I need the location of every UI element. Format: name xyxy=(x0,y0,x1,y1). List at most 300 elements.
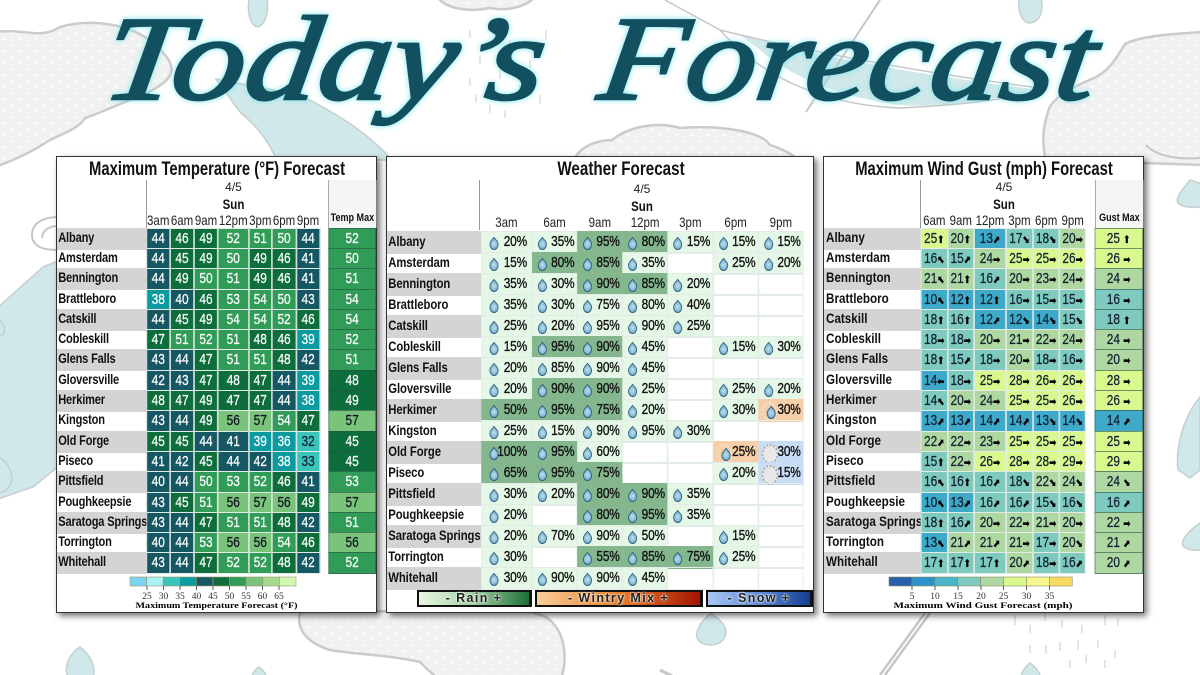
temperature table: 45 xyxy=(175,434,189,450)
wind gust colour legend: 15 xyxy=(953,592,963,602)
temperature table: 52 xyxy=(227,555,240,571)
wind gust table: 13⬈ xyxy=(950,495,971,511)
wind gust table xyxy=(824,228,1143,574)
temperature table: 49 xyxy=(199,312,213,328)
wind gust table: 20➡ xyxy=(1009,352,1030,368)
precipitation table: 20% xyxy=(504,360,527,376)
temperature table: 42 xyxy=(301,555,315,571)
precipitation table: 95% xyxy=(551,339,574,355)
temperature table: Amsterdam xyxy=(58,250,118,265)
precipitation table: 95% xyxy=(642,507,665,523)
temperature colour legend: 55 xyxy=(241,592,251,602)
precipitation table: Glens Falls xyxy=(388,360,448,375)
wind gust table: 17➡ xyxy=(1036,535,1056,551)
wind gust table: 28➡ xyxy=(1009,454,1030,470)
temperature table: 46 xyxy=(277,474,291,490)
temperature table: 51 xyxy=(175,332,189,348)
wind gust table: 15⬊ xyxy=(1062,312,1083,328)
precipitation table: 95% xyxy=(551,465,574,481)
temperature table: 45 xyxy=(345,434,359,450)
temperature table: 38 xyxy=(152,292,165,308)
temperature table: 51 xyxy=(345,515,359,531)
wind gust table: 21⬈ xyxy=(950,535,971,551)
precipitation table: 95% xyxy=(551,444,574,460)
wind gust table: Torrington xyxy=(826,534,884,550)
wind gust table: 22➡ xyxy=(1009,515,1030,531)
precipitation table: 20% xyxy=(504,528,527,544)
temperature table: 50 xyxy=(277,231,291,247)
temperature table: 47 xyxy=(175,393,189,409)
temperature table: 40 xyxy=(175,292,189,308)
precipitation table: 75% xyxy=(687,549,710,565)
temperature table: 47 xyxy=(254,393,267,409)
temperature table: 41 xyxy=(227,434,240,450)
wind gust table: 25➡ xyxy=(1036,251,1056,267)
hour labels: 6am xyxy=(923,212,945,228)
temperature table: 36 xyxy=(277,434,291,450)
wind gust table: 15⬆ xyxy=(924,454,944,470)
temperature colour legend: Maximum Temperature Forecast (°F) xyxy=(136,600,298,610)
temperature table: 38 xyxy=(301,393,315,409)
temperature table: Poughkeepsie xyxy=(58,494,131,509)
temperature table: 45 xyxy=(175,251,189,267)
temperature table: 53 xyxy=(199,535,213,551)
temperature table: 47 xyxy=(199,352,213,368)
heading: wind gust: Maximum Wind Gust (mph) Forecast xyxy=(855,159,1112,180)
wind gust table: 20➡ xyxy=(1062,515,1083,531)
wind gust table: 16⬈ xyxy=(980,495,1000,511)
hour labels: 9pm xyxy=(297,212,319,228)
wind gust table: 18➡ xyxy=(980,352,1000,368)
precipitation table: 95% xyxy=(551,402,574,418)
precipitation table: 30% xyxy=(504,486,527,502)
wind gust table: 20⬆ xyxy=(950,231,971,247)
temperature table: 56 xyxy=(227,413,240,429)
wind gust table: 12⬊ xyxy=(1009,312,1030,328)
temperature table: 54 xyxy=(277,535,291,551)
wind gust table: 15➡ xyxy=(1036,292,1056,308)
temperature table: 52 xyxy=(277,312,291,328)
precipitation table: Albany xyxy=(388,234,425,249)
column rule xyxy=(479,180,480,230)
temperature table: Kingston xyxy=(58,412,105,427)
temperature colour legend: 50 xyxy=(225,592,234,602)
temperature table: 46 xyxy=(277,251,291,267)
precipitation table: 70% xyxy=(551,528,574,544)
temperature table: 52 xyxy=(254,474,267,490)
precipitation table: 40% xyxy=(687,297,710,313)
precipitation table: 90% xyxy=(596,423,620,439)
wind gust table: 12⬈ xyxy=(980,312,1000,328)
precipitation table: 20% xyxy=(504,234,527,250)
temperature table: 48 xyxy=(277,515,291,531)
hour labels: 12pm xyxy=(219,212,248,228)
wind gust colour legend: 10 xyxy=(930,592,940,602)
wind gust table: 14⬊ xyxy=(1062,413,1083,429)
temperature table: 48 xyxy=(254,332,267,348)
temperature table: 48 xyxy=(345,373,359,389)
precipitation table: 80% xyxy=(596,486,620,502)
temperature table: 32 xyxy=(301,434,315,450)
wind gust table: 13⬈ xyxy=(980,231,1000,247)
wind gust table: 20➡ xyxy=(1009,271,1030,287)
wind gust colour legend: 5 xyxy=(910,592,915,602)
wind gust table: Cobleskill xyxy=(826,331,881,347)
wind gust table: 14⬊ xyxy=(1036,312,1056,328)
temperature table: 45 xyxy=(345,454,359,470)
precipitation table: Poughkeepsie xyxy=(388,507,464,522)
wind gust table: 24➡ xyxy=(980,393,1000,409)
precipitation table: 90% xyxy=(596,570,620,586)
temperature table: Piseco xyxy=(58,453,93,468)
temperature table: 43 xyxy=(152,495,165,511)
precipitation table: Cobleskill xyxy=(388,339,441,354)
temperature table: 51 xyxy=(199,495,213,511)
wind gust table: 25⬆ xyxy=(924,231,944,247)
temperature table: 44 xyxy=(175,515,189,531)
precipitation table: 90% xyxy=(596,381,620,397)
hour labels: 6am xyxy=(543,214,566,230)
temperature table: 33 xyxy=(301,454,315,470)
precipitation table: 90% xyxy=(551,381,574,397)
wind gust table: 24➡ xyxy=(1062,332,1083,348)
precipitation table: 90% xyxy=(596,528,620,544)
hour labels: 6pm xyxy=(273,212,295,228)
wind gust table: 16➡ xyxy=(1062,352,1083,368)
precipitation table: 30% xyxy=(687,423,710,439)
hour labels xyxy=(923,212,1084,228)
hour labels: 9am xyxy=(195,212,217,228)
precipitation table: 25% xyxy=(504,318,527,334)
gust max column header: Gust Max xyxy=(1099,212,1140,224)
wind gust table: 20⬈ xyxy=(1009,555,1030,571)
wind gust table: 16➡ xyxy=(1009,292,1030,308)
wind gust table: 16⬈ xyxy=(950,515,971,531)
temperature table: 45 xyxy=(199,454,213,470)
temperature table: 51 xyxy=(345,352,359,368)
wind gust table: 18➡ xyxy=(924,332,944,348)
hour labels: 6pm xyxy=(1035,212,1057,228)
precipitation table: Torrington xyxy=(388,549,444,564)
precipitation table: 30% xyxy=(777,402,801,418)
precipitation table: 35% xyxy=(687,507,710,523)
temperature table: 57 xyxy=(254,413,267,429)
wind gust colour legend: 25 xyxy=(999,592,1008,602)
temperature table: 42 xyxy=(301,352,315,368)
precipitation table: 80% xyxy=(551,255,574,271)
precipitation table: 45% xyxy=(642,339,665,355)
temperature table: Saratoga Springs xyxy=(58,514,147,529)
temperature table: 48 xyxy=(277,555,291,571)
precipitation table: 25% xyxy=(732,255,755,271)
wind gust table: 25 ➡ xyxy=(1107,434,1131,450)
precipitation table: 20% xyxy=(504,507,527,523)
temperature table: Herkimer xyxy=(58,392,105,407)
wind gust table: 29 ➡ xyxy=(1107,454,1131,470)
wind gust table: Gloversville xyxy=(826,372,892,388)
temperature table: Torrington xyxy=(58,534,112,549)
day label: Sun xyxy=(223,196,244,212)
temperature table: 49 xyxy=(199,413,213,429)
precipitation table: 80% xyxy=(642,234,665,250)
wind gust table: 26➡ xyxy=(1062,373,1083,389)
hour labels: 9pm xyxy=(1061,212,1084,228)
temperature table: 44 xyxy=(199,434,213,450)
temperature table: 51 xyxy=(254,352,267,368)
wind gust table: 16 ⬈ xyxy=(1107,495,1131,511)
wind gust table: 18➡ xyxy=(950,373,971,389)
precipitation table: 75% xyxy=(596,297,620,313)
wind gust table: 18⬊ xyxy=(1036,231,1056,247)
wind gust table: 29➡ xyxy=(1062,454,1083,470)
temperature table: 39 xyxy=(301,332,315,348)
temperature table: Albany xyxy=(58,230,94,245)
temperature table: 46 xyxy=(301,535,315,551)
date label: 4/5 xyxy=(225,180,242,194)
precipitation table: 90% xyxy=(642,318,665,334)
temperature table: 48 xyxy=(152,393,165,409)
temperature table: 49 xyxy=(301,495,315,511)
precipitation table: 35% xyxy=(551,234,574,250)
wind gust table: Whitehall xyxy=(826,554,878,570)
temperature table: 57 xyxy=(345,413,359,429)
wind gust table: 15⬈ xyxy=(950,352,971,368)
temperature table: 51 xyxy=(227,352,240,368)
wind gust table: 14⬅ xyxy=(924,373,944,389)
precipitation table: Piseco xyxy=(388,465,424,480)
precipitation table: 25% xyxy=(732,444,755,460)
hour labels xyxy=(147,212,319,228)
temperature table: 52 xyxy=(345,231,359,247)
wind gust colour legend: Maximum Wind Gust Forecast (mph) xyxy=(894,600,1073,610)
temperature table: 48 xyxy=(277,352,291,368)
wind gust table: 22⬊ xyxy=(1036,474,1056,490)
temperature table: 44 xyxy=(175,474,189,490)
precipitation table: 35% xyxy=(642,255,665,271)
wind gust table: 20⬊ xyxy=(1062,535,1083,551)
wind gust table: 24➡ xyxy=(1062,271,1083,287)
temperature table: 41 xyxy=(301,474,315,490)
temperature table: 56 xyxy=(277,495,291,511)
wind gust table: 28➡ xyxy=(1036,454,1056,470)
temperature table: 41 xyxy=(152,454,165,470)
temperature table: 51 xyxy=(254,515,267,531)
legend: wintry mix xyxy=(535,590,703,607)
hour labels: 3pm xyxy=(249,212,271,228)
wind gust table: 13⬈ xyxy=(950,413,971,429)
wind gust table: 21⬉ xyxy=(924,271,944,287)
precipitation table: 85% xyxy=(551,360,574,376)
wind gust colour legend: 35 xyxy=(1045,592,1054,602)
temperature table: Bennington xyxy=(58,270,118,285)
temperature table: 54 xyxy=(277,413,291,429)
precipitation table: 20% xyxy=(777,255,801,271)
temperature table: 38 xyxy=(277,454,291,470)
temperature table: 53 xyxy=(227,292,240,308)
temperature table: 45 xyxy=(175,312,189,328)
temperature table: 46 xyxy=(301,312,315,328)
wind gust table: 14⬉ xyxy=(924,393,944,409)
temperature table: 47 xyxy=(301,413,315,429)
temperature table: 48 xyxy=(227,373,240,389)
wind gust table: Old Forge xyxy=(826,433,881,449)
temperature table: Pittsfield xyxy=(58,473,103,488)
wind gust table: 21⬈ xyxy=(980,535,1000,551)
wind gust table: 22➡ xyxy=(1036,332,1056,348)
precipitation table: 20% xyxy=(551,486,574,502)
precipitation table: 80% xyxy=(642,297,665,313)
temperature table: 54 xyxy=(254,292,267,308)
precipitation table: 15% xyxy=(504,255,527,271)
temperature table: 39 xyxy=(301,373,315,389)
precipitation table: 35% xyxy=(504,276,527,292)
wind gust table: 14⬈ xyxy=(1009,413,1030,429)
precipitation table: 85% xyxy=(642,276,665,292)
precipitation table: 20% xyxy=(687,276,710,292)
temperature table: 39 xyxy=(254,434,267,450)
temperature table: 44 xyxy=(301,231,315,247)
temperature table: 50 xyxy=(199,271,213,287)
temperature colour legend: 35 xyxy=(175,592,185,602)
wind gust table: 26➡ xyxy=(1036,373,1056,389)
temperature table xyxy=(57,228,376,574)
day label: Sun xyxy=(631,198,653,214)
wind gust table: 13⬈ xyxy=(924,413,944,429)
wind gust table: 16⬈ xyxy=(1009,495,1030,511)
temperature table: 56 xyxy=(345,535,359,551)
wind gust table: 16⬆ xyxy=(950,312,971,328)
precipitation table: 15% xyxy=(732,234,755,250)
wind gust table: Bennington xyxy=(826,270,891,286)
temperature colour legend xyxy=(130,576,298,610)
temperature table: 49 xyxy=(175,271,189,287)
hour labels: 3pm xyxy=(1008,212,1031,228)
wind gust table: Poughkeepsie xyxy=(826,494,905,510)
wind gust table: 18➡ xyxy=(1036,555,1056,571)
temperature table: 51 xyxy=(254,231,267,247)
wind gust table: 17⬆ xyxy=(950,555,971,571)
precipitation table: Whitehall xyxy=(388,570,438,585)
wind gust table: 25 ⬆ xyxy=(1107,231,1131,247)
temperature table: 57 xyxy=(345,495,359,511)
precipitation table: 20% xyxy=(504,381,527,397)
temperature table: 44 xyxy=(175,555,189,571)
temperature table: 44 xyxy=(152,231,165,247)
wind gust table: 21➡ xyxy=(1036,515,1056,531)
temperature table: 42 xyxy=(254,454,267,470)
temperature table: 42 xyxy=(301,515,315,531)
temperature table: Old Forge xyxy=(58,433,109,448)
precipitation table: 90% xyxy=(551,570,574,586)
precipitation table: 25% xyxy=(687,318,710,334)
wind gust table: 13⬉ xyxy=(924,535,944,551)
temperature table: 41 xyxy=(301,251,315,267)
temp max column header: Temp Max xyxy=(331,212,374,224)
wind gust table: 26➡ xyxy=(1062,393,1083,409)
temperature table: 49 xyxy=(199,251,213,267)
wind gust table: 26 ➡ xyxy=(1107,393,1131,409)
precipitation table: 95% xyxy=(596,234,620,250)
wind gust table: 12⬆ xyxy=(980,292,1000,308)
temperature table: 49 xyxy=(254,251,267,267)
column rule xyxy=(146,180,147,228)
wind gust table: 24 ➡ xyxy=(1107,271,1131,287)
hour labels: 9pm xyxy=(770,214,792,230)
wind gust table: 14⬈ xyxy=(980,413,1000,429)
precipitation table: 15% xyxy=(777,234,801,250)
temperature table: 42 xyxy=(152,373,165,389)
column rule xyxy=(920,180,921,228)
precipitation table: 75% xyxy=(596,465,620,481)
wind gust table: 26 ➡ xyxy=(1107,251,1131,267)
wind gust table: 24➡ xyxy=(980,251,1000,267)
precipitation table: 75% xyxy=(596,402,620,418)
temp max column header xyxy=(328,180,376,228)
wind gust table: 26➡ xyxy=(1062,251,1083,267)
temperature table: 42 xyxy=(175,454,189,470)
wind gust table: 28➡ xyxy=(1009,373,1030,389)
precipitation table: 90% xyxy=(642,486,665,502)
precipitation table: 15% xyxy=(777,465,801,481)
wind gust table: 16⬆ xyxy=(950,474,971,490)
temperature table: 54 xyxy=(227,312,240,328)
precipitation table: 30% xyxy=(551,297,574,313)
temperature table: 50 xyxy=(199,474,213,490)
wind gust table: 24 ⬊ xyxy=(1107,474,1131,490)
temperature table: 50 xyxy=(227,251,240,267)
wind gust table: 16 ➡ xyxy=(1107,292,1131,308)
temperature table: 52 xyxy=(254,555,267,571)
temperature table: 49 xyxy=(199,393,213,409)
temperature table: 47 xyxy=(199,515,213,531)
wind gust colour legend xyxy=(888,576,1073,610)
temperature table: 46 xyxy=(277,271,291,287)
wind gust table: 23➡ xyxy=(980,434,1000,450)
panel: maximum temperature forecast xyxy=(56,156,377,613)
temperature table: 56 xyxy=(227,495,240,511)
precipitation table: Saratoga Springs xyxy=(388,528,481,543)
temperature table: 49 xyxy=(199,231,213,247)
temperature table: 45 xyxy=(152,434,165,450)
heading: weather: Weather Forecast xyxy=(557,159,685,180)
wind gust table: 22➡ xyxy=(950,434,971,450)
precipitation table: 50% xyxy=(504,402,527,418)
temperature table: 51 xyxy=(227,271,240,287)
temperature table: 54 xyxy=(345,312,359,328)
wind gust table: 12⬆ xyxy=(950,292,971,308)
wind gust table: 21➡ xyxy=(1009,535,1030,551)
precipitation table: 20% xyxy=(642,402,665,418)
precipitation table: 30% xyxy=(777,339,801,355)
hour labels: 3am xyxy=(495,214,518,230)
wind gust table: Herkimer xyxy=(826,392,877,408)
temperature table: 40 xyxy=(152,535,165,551)
precipitation table: 65% xyxy=(504,465,527,481)
temperature table: Gloversville xyxy=(58,372,119,387)
temperature table: 51 xyxy=(345,271,359,287)
temperature table: 44 xyxy=(277,393,291,409)
precipitation table: 30% xyxy=(732,402,755,418)
wind gust table: Pittsfield xyxy=(826,473,875,489)
wind gust table: 25➡ xyxy=(1009,434,1030,450)
precipitation table: 15% xyxy=(732,339,755,355)
wind gust table: 26➡ xyxy=(980,454,1000,470)
temperature colour legend: 60 xyxy=(258,592,268,602)
wind gust table: 17⬆ xyxy=(924,555,944,571)
wind gust table: Piseco xyxy=(826,453,864,469)
wind gust table: 20➡ xyxy=(1062,231,1083,247)
temperature table: 47 xyxy=(254,373,267,389)
